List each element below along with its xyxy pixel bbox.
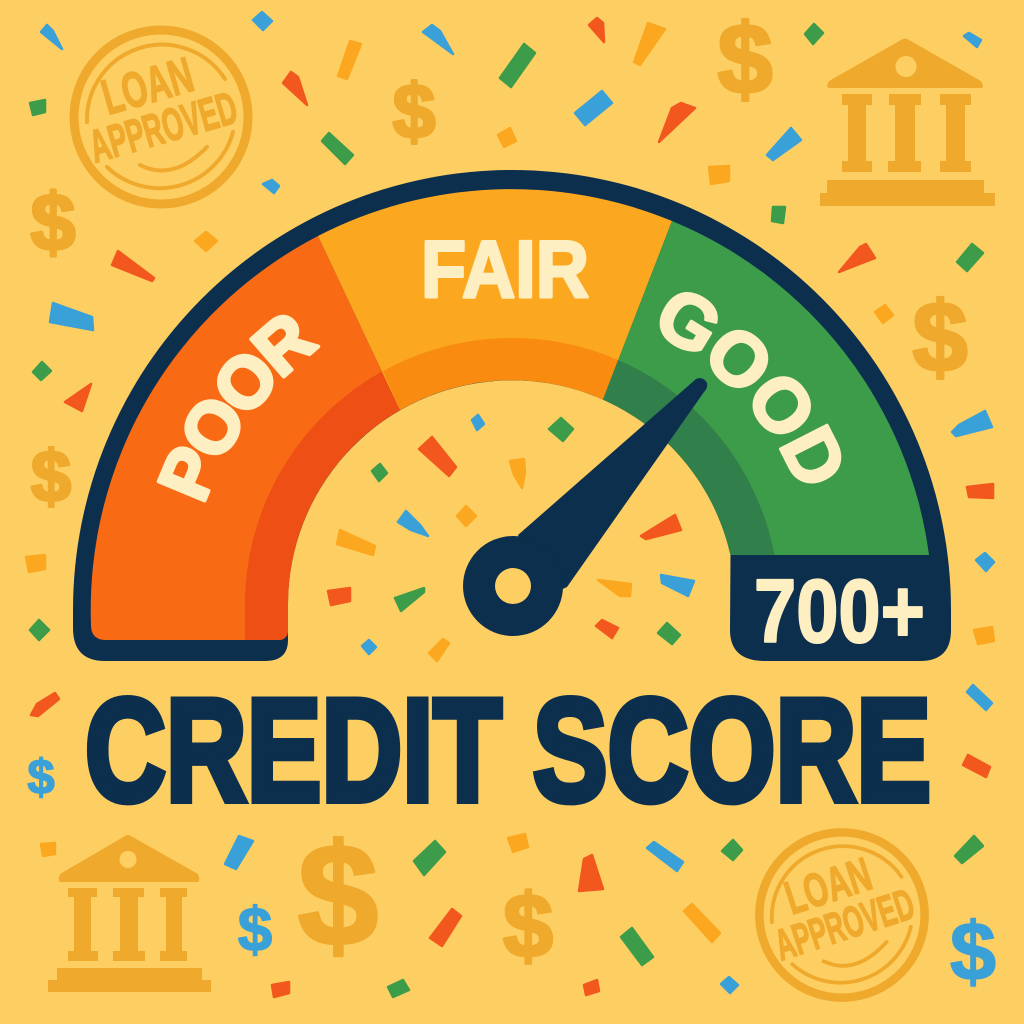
band: fair inner xyxy=(383,338,618,410)
stamp: loan approved bottom right: APPROVED xyxy=(769,879,920,970)
segment: fair xyxy=(318,189,672,410)
stamp: loan approved top left xyxy=(74,30,248,204)
stamp: loan approved top left: LOAN xyxy=(96,46,199,126)
icons: blue dollar signs: $ xyxy=(27,751,55,805)
icons: amber dollar signs: $ xyxy=(393,69,435,155)
icons: blue dollar signs: $ xyxy=(238,896,272,965)
label: fair: FAIR xyxy=(421,225,589,315)
segment: good xyxy=(603,221,929,555)
stamp: loan approved bottom right: LOAN xyxy=(779,848,878,925)
icon: bank top right xyxy=(820,38,995,206)
label: poor: POOR xyxy=(156,314,320,502)
icons: amber dollar signs: $ xyxy=(31,437,71,517)
label: good: GOOD xyxy=(660,292,842,484)
icons: amber dollar signs: $ xyxy=(717,3,773,114)
gauge frame xyxy=(73,170,951,661)
needle xyxy=(463,378,707,636)
icons: blue dollar signs: $ xyxy=(950,905,996,998)
icons: amber dollar signs: $ xyxy=(912,281,968,392)
label: 700+: 700+ xyxy=(754,562,925,662)
icons: amber dollar signs: $ xyxy=(503,877,553,977)
icons: blue dollar signs xyxy=(27,751,996,998)
band: poor inner xyxy=(245,371,400,640)
segment: poor xyxy=(91,236,400,640)
icon: bank bottom left xyxy=(48,835,211,992)
icons: amber dollar signs: $ xyxy=(298,814,378,976)
gauge xyxy=(73,170,951,662)
band: good inner xyxy=(603,360,774,555)
icons: amber dollar signs: $ xyxy=(30,178,76,268)
stamp: loan approved top left: APPROVED xyxy=(83,81,243,173)
stamp: loan approved bottom right xyxy=(757,830,927,1000)
